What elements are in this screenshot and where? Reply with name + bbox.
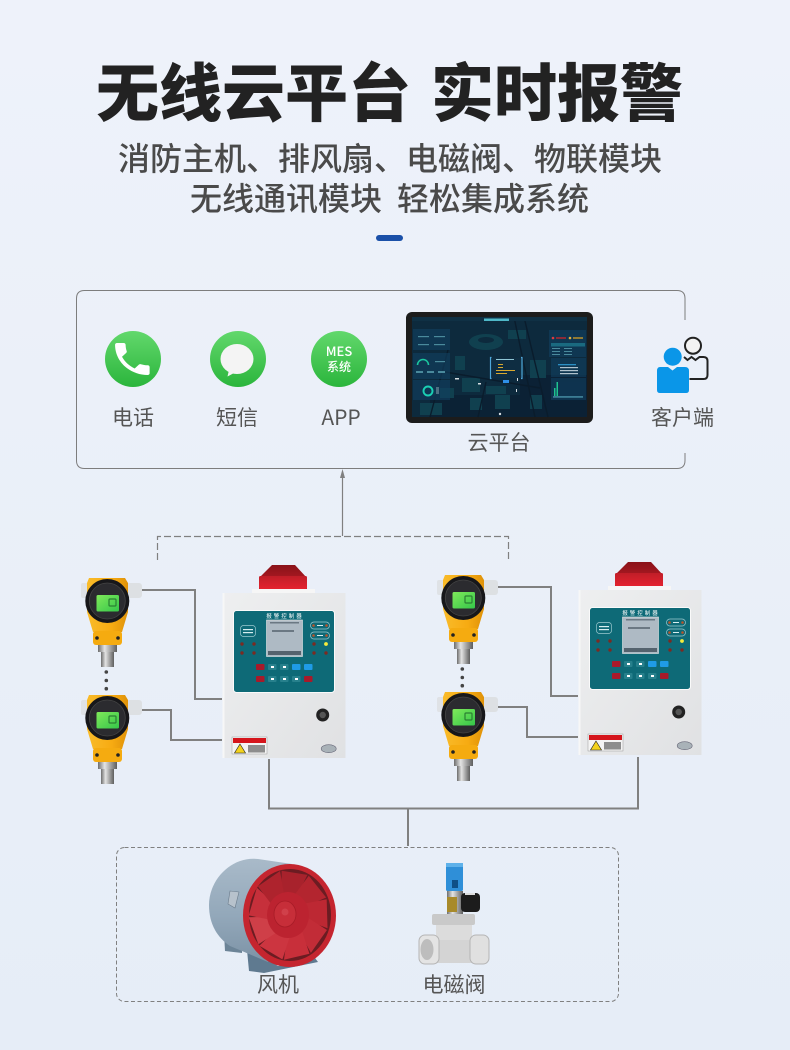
label: solenoid valve: 电磁阀 <box>422 969 486 999</box>
panel: cloud platform notification channels <box>76 290 714 468</box>
icon: client <box>657 338 708 393</box>
label: phone: 电话 <box>112 402 154 432</box>
icon: message <box>210 331 266 387</box>
right alarm controller: 报警控制器 <box>622 609 660 617</box>
icon: solenoid valve <box>419 863 489 964</box>
title <box>96 44 683 135</box>
label: client: 客户端 <box>651 402 714 432</box>
subtitle: 轻松集成系统 <box>397 174 589 220</box>
left alarm controller <box>222 565 346 758</box>
icon: MES system: MES <box>326 341 352 360</box>
subtitle: 消防主机、排风扇、电磁阀、物联模块 <box>118 134 662 180</box>
label: fan: 风机 <box>257 969 299 999</box>
panel: controlled devices <box>116 848 618 1002</box>
subtitle: 无线通讯模块 <box>190 174 382 220</box>
accent bar <box>376 235 403 241</box>
tablet with cloud dashboard <box>406 312 593 423</box>
wiring: controllers to devices <box>269 757 638 846</box>
icon: phone <box>105 331 161 387</box>
right alarm controller <box>578 562 702 755</box>
right group: pressure transmitters <box>437 575 498 781</box>
icon: fan <box>209 859 336 973</box>
label: APP: APP <box>321 402 361 432</box>
label: SMS: 短信 <box>216 402 258 432</box>
icon: MES system <box>311 331 367 387</box>
label: cloud platform: 云平台 <box>468 427 530 457</box>
wiring: right group sensors to controller <box>498 587 578 737</box>
title: 无线云平台 <box>96 44 411 135</box>
dashed bracket <box>158 536 508 560</box>
title: 实时报警 <box>431 44 683 135</box>
icon: MES system: 系统 <box>327 358 351 375</box>
subtitle <box>118 134 662 220</box>
left group: pressure transmitters <box>81 578 142 784</box>
arrow: upload to cloud <box>340 469 345 536</box>
left alarm controller: 报警控制器 <box>266 612 304 620</box>
wiring: left group sensors to controller <box>142 590 222 740</box>
